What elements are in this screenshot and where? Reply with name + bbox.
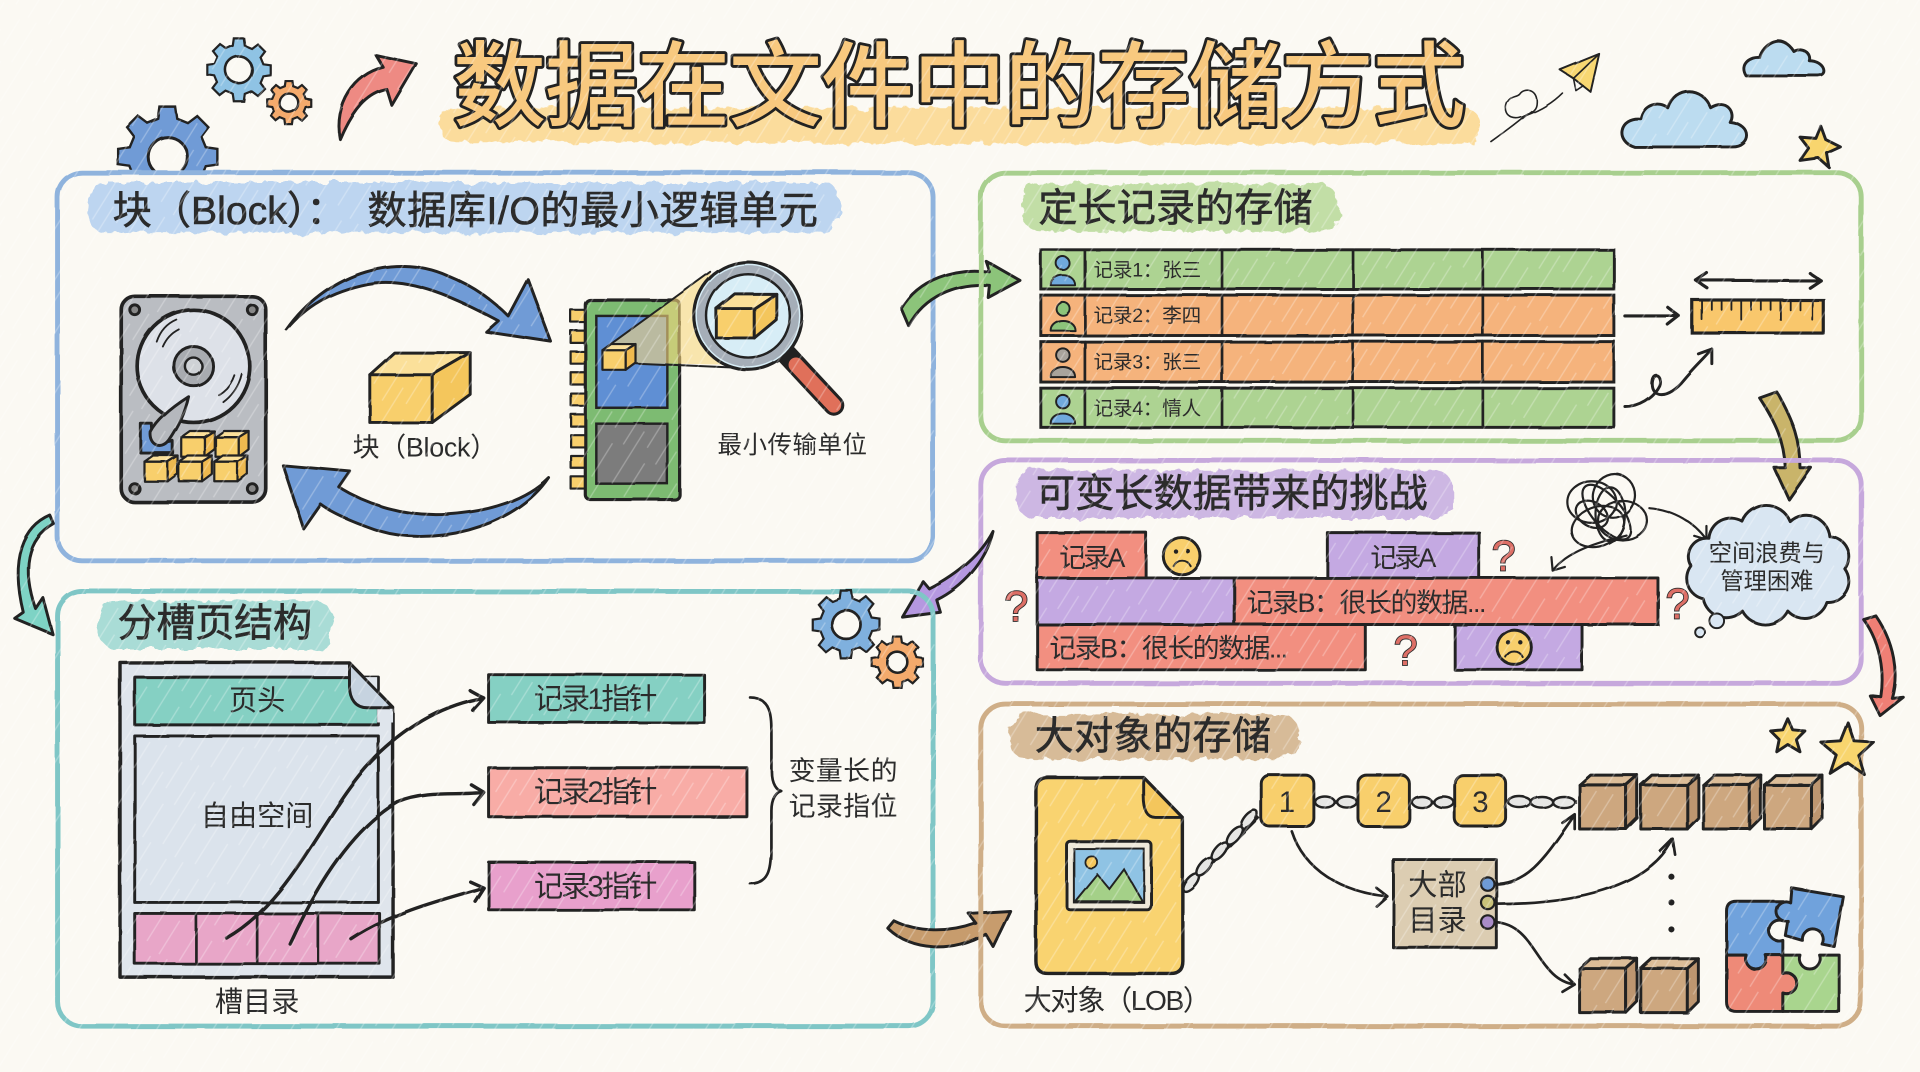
label: block: 块（Block） <box>353 433 497 463</box>
question marks: ? <box>1394 627 1418 675</box>
heading: fixed length: 定长记录的存储 <box>1038 188 1313 231</box>
heading: block <box>88 182 840 233</box>
label: variable length pointers <box>789 756 898 822</box>
decorations: top left gears <box>116 37 312 170</box>
icon: magnifying glass <box>602 262 834 405</box>
node 1: 1 <box>1279 786 1295 819</box>
arrow: fixed to variable <box>1760 392 1811 500</box>
record row 3: 记录3：张三 <box>1093 352 1201 374</box>
pointer 1: 记录1指针 <box>534 683 658 716</box>
record row 3 <box>1041 342 1614 382</box>
arrow: memory to disk <box>283 465 549 536</box>
node 1 <box>1261 775 1314 827</box>
record row 2: 记录2：李四 <box>1093 305 1201 327</box>
arrows: directory links <box>1292 814 1675 992</box>
icon: puzzle <box>1727 888 1843 1011</box>
node 3 <box>1455 775 1506 827</box>
label: record B lower: 记录B：很长的数据... <box>1049 634 1288 664</box>
callout: thought cloud <box>1687 505 1849 637</box>
record row 1 <box>1041 250 1614 289</box>
arrow: variable to large object <box>1864 616 1903 715</box>
directory box: 目录 <box>1408 905 1467 938</box>
question marks: ? <box>1666 580 1689 628</box>
node 2 <box>1358 775 1409 827</box>
record row 2 <box>1041 295 1614 336</box>
label: record A red: 记录A <box>1059 543 1125 573</box>
question marks: ? <box>1004 583 1028 631</box>
question marks <box>1004 533 1689 675</box>
icon: paper plane with trail <box>1491 54 1599 142</box>
icon: sad face 1 <box>1163 538 1200 574</box>
arrow: block to slotted page <box>15 516 54 634</box>
panel: block <box>58 173 933 561</box>
node 2: 2 <box>1376 786 1392 819</box>
icon: scribble tangle <box>1551 467 1707 571</box>
directory box: 大部 <box>1408 869 1467 902</box>
label: smallest transfer unit: 最小传输单位 <box>718 431 867 459</box>
icon: star top right <box>1800 126 1840 168</box>
pointer 2: 记录2指针 <box>534 776 658 809</box>
pointer 1 <box>489 675 704 722</box>
title: 数据在文件中的存储方式 <box>453 35 1466 139</box>
label: page header: 页头 <box>229 685 285 716</box>
arrow: disk to memory <box>287 266 551 342</box>
record row 4 <box>1041 388 1614 427</box>
pointer 3 <box>489 862 694 910</box>
heading: variable length: 可变长数据带来的挑战 <box>1036 473 1428 516</box>
icon: clouds <box>1621 41 1824 147</box>
icon: stars <box>1771 719 1873 775</box>
record row 4: 记录4：情人 <box>1093 398 1201 420</box>
panel: large object <box>981 704 1873 1026</box>
panel: slotted page <box>58 591 933 1026</box>
callout: thought cloud: 管理困难 <box>1720 568 1813 594</box>
icon: hard disk <box>121 296 266 502</box>
label: slot directory: 槽目录 <box>215 986 299 1017</box>
icon: block cube <box>370 353 470 422</box>
label: record B upper: 记录B：很长的数据... <box>1247 588 1487 618</box>
panel: fixed length records <box>981 173 1861 441</box>
heading: block: 数据库I/O的最小逻辑单元 <box>367 190 818 233</box>
table: records <box>1041 250 1614 427</box>
icon: memory module <box>571 300 680 500</box>
icon: sad face 2 <box>1498 631 1532 665</box>
boxes: data blocks <box>1580 775 1822 1013</box>
node 3: 3 <box>1472 786 1489 819</box>
brace: variable length <box>751 698 781 884</box>
arrow: slotted page to large object <box>888 911 1010 947</box>
icon: gears <box>812 591 923 688</box>
label: free space: 自由空间 <box>201 800 313 831</box>
label: variable length pointers: 记录指位 <box>789 792 898 822</box>
callout: thought cloud: 空间浪费与 <box>1709 540 1825 566</box>
icon: ruler with arrows <box>1625 273 1823 407</box>
icon: red arrow beside title <box>339 55 416 140</box>
dots: continuation <box>1668 874 1674 932</box>
record row 1: 记录1：张三 <box>1093 260 1201 282</box>
heading: large object: 大对象的存储 <box>1035 715 1271 758</box>
pointer 2 <box>489 768 747 817</box>
arrows: slots to pointers <box>227 691 484 944</box>
panel: variable length challenge <box>981 460 1861 683</box>
blocks: fragmented records <box>1037 533 1658 670</box>
diagram: page structure <box>120 662 393 977</box>
heading: block: 块（Block）： <box>113 190 346 233</box>
directory box <box>1393 860 1496 948</box>
question marks: ? <box>1492 533 1516 581</box>
heading: slotted page: 分槽页结构 <box>118 603 312 646</box>
arrow: variable to slotted page <box>902 531 993 617</box>
chain links <box>1181 797 1577 894</box>
icon: document with picture <box>1036 778 1183 973</box>
label: LOB: 大对象（LOB） <box>1024 985 1211 1016</box>
pointer 3: 记录3指针 <box>534 870 658 903</box>
label: variable length pointers: 变量长的 <box>789 756 898 786</box>
label: record A purple: 记录A <box>1370 543 1436 573</box>
arrow: block to fixed records <box>901 261 1020 326</box>
